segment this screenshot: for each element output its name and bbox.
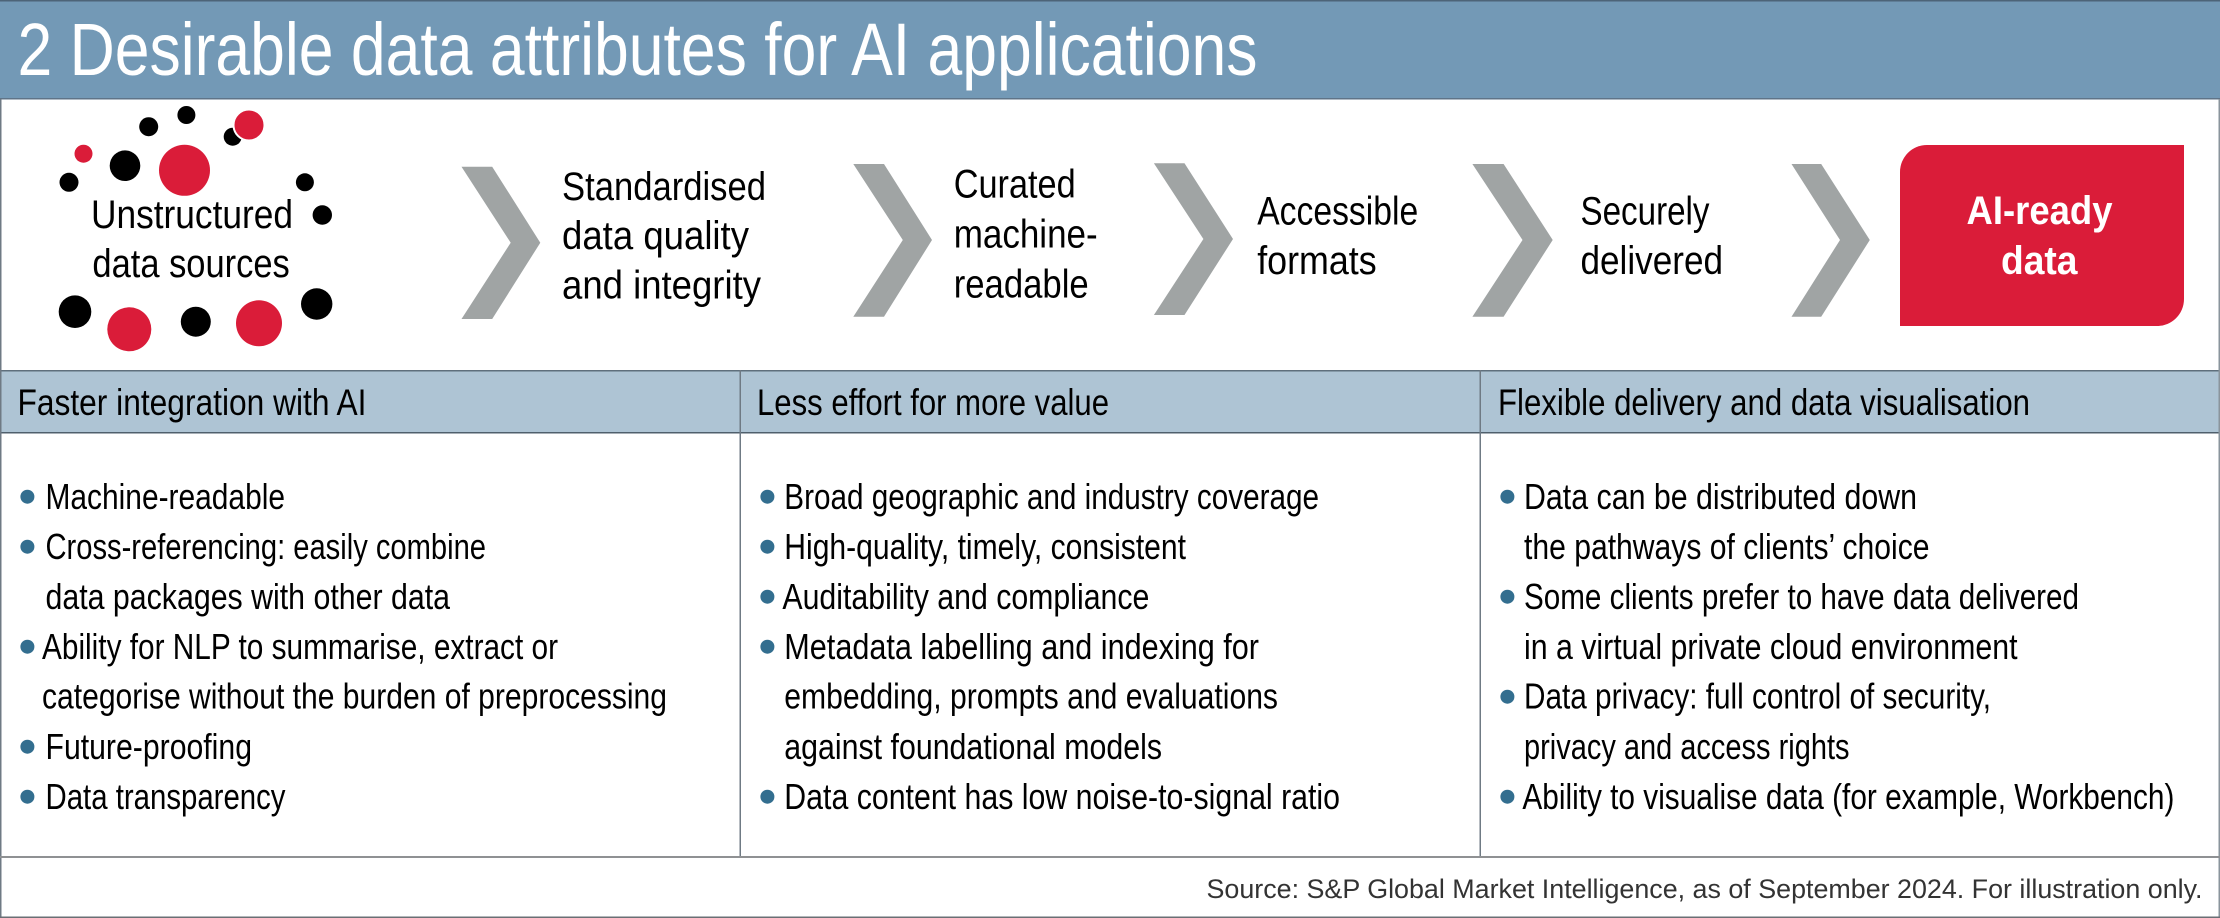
- callout: AI-ready data: [1900, 145, 2184, 326]
- text: standardised data quality and integrity: [562, 165, 766, 307]
- panel: less effort bullets: Metadata labelling and indexing for: [784, 626, 1259, 667]
- panel: less effort bullets: Broad geographic and industry coverage: [784, 476, 1319, 517]
- arrow: chevron 4: [1472, 164, 1553, 317]
- text: accessible formats: Accessible: [1257, 189, 1418, 233]
- panel: faster integration bullets: data packages with other data: [46, 576, 451, 617]
- panel: faster integration bullets: Data transparency: [46, 776, 286, 817]
- text: securely delivered: Securely: [1580, 189, 1710, 233]
- panel: less effort bullets: [760, 476, 1340, 817]
- callout: AI-ready data: AI-ready: [1966, 189, 2113, 233]
- arrow: chevron 5: [1792, 164, 1870, 317]
- title banner: [0, 0, 2220, 100]
- panel: flexible delivery bullets: the pathways of clients’ choice: [1524, 526, 1930, 567]
- panel: data pipeline flow: [59, 106, 2184, 351]
- panel: less effort bullets: against foundational models: [784, 726, 1162, 767]
- text: securely delivered: [1580, 189, 1723, 283]
- panel: faster integration bullets: Machine-readable: [46, 476, 285, 517]
- panel: flexible delivery bullets: Data privacy: full control of security,: [1524, 676, 1991, 717]
- panel: flexible delivery bullets: Some clients prefer to have data delivered: [1524, 576, 2079, 617]
- panel: faster integration bullets: [20, 476, 667, 817]
- arrow: chevron 3: [1154, 163, 1233, 315]
- text: curated machine-readable: machine-: [954, 213, 1098, 257]
- text: unstructured data sources: [91, 193, 293, 286]
- panel: faster integration bullets: Cross-referencing: easily combine: [46, 526, 486, 567]
- text: standardised data quality and integrity: data quality: [562, 214, 749, 258]
- panel: flexible delivery bullets: Data can be distributed down: [1524, 476, 1917, 517]
- panel: faster integration bullets: categorise without the burden of preprocessing: [42, 676, 667, 717]
- icon: unstructured data source dots: [59, 106, 332, 351]
- text: accessible formats: [1257, 189, 1418, 283]
- callout: AI-ready data: data: [2001, 239, 2078, 283]
- text: curated machine-readable: [954, 163, 1098, 306]
- text: securely delivered: delivered: [1580, 239, 1723, 283]
- text: curated machine-readable: Curated: [954, 163, 1076, 207]
- text: curated machine-readable: readable: [954, 262, 1089, 306]
- panel: less effort bullets: High-quality, timely, consistent: [784, 526, 1186, 567]
- panel: flexible delivery bullets: privacy and access rights: [1524, 726, 1850, 767]
- text: accessible formats: formats: [1257, 239, 1377, 283]
- arrow: chevron 1: [462, 167, 540, 319]
- heading: faster integration with AI: Faster integration with AI: [18, 382, 366, 423]
- text: standardised data quality and integrity: Standardised: [562, 165, 766, 209]
- arrow: chevron 2: [853, 164, 932, 317]
- source note: Source: S&P Global Market Intelligence, as of September 2024. For illustration only.: [1206, 874, 2202, 904]
- panel: faster integration bullets: Ability for NLP to summarise, extract or: [42, 626, 558, 667]
- text: unstructured data sources: Unstructured: [91, 193, 293, 237]
- heading: less effort for more value: Less effort for more value: [757, 382, 1109, 423]
- text: standardised data quality and integrity: and integrity: [562, 263, 761, 307]
- panel: less effort bullets: Data content has low noise-to-signal ratio: [784, 776, 1340, 817]
- panel: flexible delivery bullets: [1500, 476, 2174, 817]
- panel: less effort bullets: embedding, prompts and evaluations: [784, 676, 1278, 717]
- text: unstructured data sources: data sources: [92, 242, 290, 286]
- title: 2 Desirable data attributes for AI applications: [18, 8, 1258, 91]
- heading: flexible delivery and data visualisation: Flexible delivery and data visualisation: [1498, 382, 2030, 423]
- panel: faster integration bullets: Future-proofing: [46, 726, 252, 767]
- panel: flexible delivery bullets: in a virtual private cloud environment: [1524, 626, 2018, 667]
- panel: column header band: [0, 370, 2220, 434]
- panel: less effort bullets: Auditability and compliance: [782, 576, 1149, 617]
